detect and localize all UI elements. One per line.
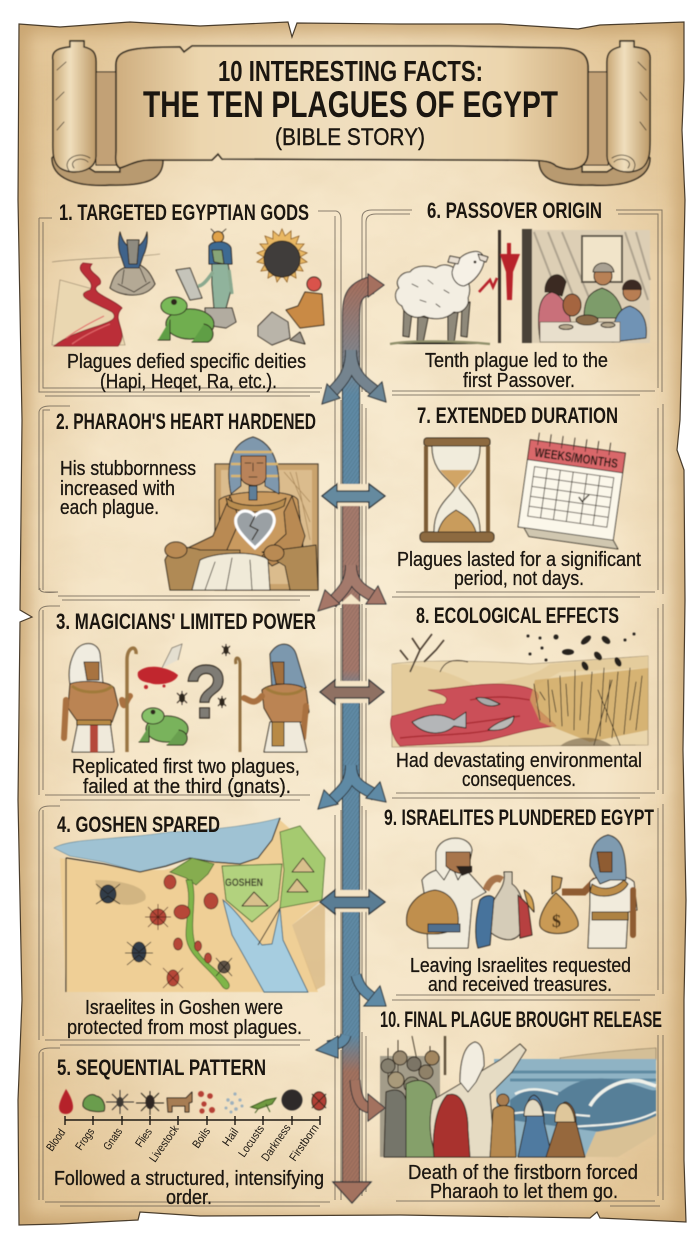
description 7 (397, 549, 641, 590)
description 4 (67, 997, 302, 1039)
map label: Goshen: GOSHEN (225, 877, 263, 889)
heading 7: 7. EXTENDED DURATION (417, 403, 618, 428)
illustration: magicians, plagues and question mark (64, 644, 309, 752)
arrow: fork at first panels (322, 350, 386, 404)
question mark: ? (185, 650, 227, 735)
timeline labels: Frogs (74, 1126, 97, 1153)
arrow: left branch to panel 5 (316, 1035, 346, 1058)
description 5: order. (166, 1187, 212, 1209)
timeline labels: Boils (191, 1126, 213, 1151)
panel 4: Goshen spared (39, 806, 341, 1045)
description 6: first Passover. (463, 370, 575, 392)
description 2: His stubbornness (60, 458, 196, 480)
timeline labels: Hail (221, 1126, 241, 1149)
panel 3: magicians' limited power (39, 606, 341, 800)
description 10: Death of the firstborn forced (408, 1162, 638, 1184)
heading 2: 2. PHARAOH'S HEART HARDENED (56, 409, 316, 434)
description 2: each plague. (60, 497, 159, 519)
description 9: Leaving Israelites requested (410, 955, 631, 977)
description 6: Tenth plague led to the (425, 350, 608, 372)
illustration: gods and plagues (52, 229, 324, 346)
heading 6: 6. PASSOVER ORIGIN (427, 198, 602, 223)
panel 2: Pharaoh's heart hardened (39, 400, 341, 600)
icons: ten plagues (59, 1089, 326, 1115)
timeline labels (45, 1122, 322, 1165)
arrow: fork at second row (318, 565, 386, 611)
description 3: failed at the third (gnats). (83, 776, 291, 798)
panel 1: targeted Egyptian gods (39, 200, 341, 396)
illustration: Pharaoh on throne with broken heart (165, 437, 318, 590)
arrow: right branch to panel 10 (356, 975, 386, 1006)
scroll: left roll (52, 41, 163, 185)
calendar label: WEEKS/MONTHS (534, 445, 619, 471)
panel 5: sequential pattern (39, 1048, 341, 1209)
panel 7: extended duration (362, 403, 663, 597)
timeline labels: Darkness (260, 1122, 294, 1164)
illustration: map of Egypt and Goshen (54, 818, 325, 992)
panel 6: Passover origin (362, 198, 662, 395)
scroll: right roll (539, 41, 650, 185)
heading 3: 3. MAGICIANS' LIMITED POWER (56, 609, 316, 634)
description 1: (Hapi, Heqet, Ra, etc.). (100, 371, 277, 393)
heading 1: 1. TARGETED EGYPTIAN GODS (59, 200, 309, 225)
description 3 (72, 756, 300, 798)
title: line three: (BIBLE STORY) (275, 124, 425, 151)
timeline labels: Flies (134, 1126, 155, 1150)
illustration: hourglass (420, 438, 494, 542)
arrow: double at Pharaoh row (322, 484, 385, 508)
panel 9: Israelites plundered Egypt (362, 804, 663, 1000)
description 9 (410, 955, 631, 996)
illustration: ruined landscape (391, 632, 648, 747)
timeline labels: Gnats (102, 1126, 125, 1153)
description 1 (67, 351, 306, 393)
illustration: Moses leading crowd at the sea (380, 1036, 656, 1157)
illustration: Israelite and Pharaoh exchanging treasures (407, 835, 637, 948)
title: line one: 10 INTERESTING FACTS: (218, 56, 483, 88)
central arrow network (316, 274, 386, 1203)
arrow: double at plunder row (320, 890, 385, 914)
panel 8: ecological effects (362, 603, 663, 798)
illustration: Israelite and Pharaoh exchanging treasures: $ (552, 911, 561, 931)
title: line two: THE TEN PLAGUES OF EGYPT (143, 84, 558, 125)
description 4: protected from most plagues. (67, 1017, 302, 1039)
arrow: right branch to Moses (355, 1080, 385, 1121)
title banner (52, 41, 650, 185)
description 7: Plagues lasted for a significant (397, 549, 641, 571)
scroll: main band (116, 46, 588, 169)
panel 10: final plague brought release (362, 1007, 663, 1206)
description 8: consequences. (462, 769, 576, 791)
description 2 (60, 458, 196, 519)
timeline labels: Livestock (148, 1123, 182, 1165)
description 1: Plagues defied specific deities (67, 351, 306, 373)
heading 5: 5. SEQUENTIAL PATTERN (57, 1055, 266, 1080)
description 2: increased with (60, 478, 175, 500)
description 3: Replicated first two plagues, (72, 756, 300, 778)
description 5 (54, 1168, 324, 1209)
illustration: calendar (517, 432, 632, 549)
illustration: lamb, doorpost and family (390, 229, 650, 344)
heading 4: 4. GOSHEN SPARED (57, 812, 220, 837)
arrow: main vertical shaft with top curve (351, 274, 384, 1184)
description 8: Had devastating environmental (396, 750, 642, 772)
timeline axis (65, 1116, 320, 1125)
heading 8: 8. ECOLOGICAL EFFECTS (416, 603, 619, 628)
arrow: double at magicians row (320, 680, 384, 704)
arrow: fork at third row (318, 765, 386, 809)
description 6 (425, 350, 608, 392)
description 10 (408, 1162, 638, 1203)
description 9: and received treasures. (428, 974, 612, 996)
timeline labels: Firstborn (288, 1122, 322, 1164)
timeline labels: Locusts (237, 1123, 267, 1160)
description 5: Followed a structured, intensifying (54, 1168, 324, 1190)
timeline labels: Blood (45, 1127, 68, 1154)
description 8 (396, 750, 642, 791)
description 7: period, not days. (454, 568, 584, 590)
arrow: bottom head (333, 1182, 371, 1203)
description 4: Israelites in Goshen were (85, 997, 283, 1019)
description 10: Pharaoh to let them go. (430, 1181, 618, 1203)
